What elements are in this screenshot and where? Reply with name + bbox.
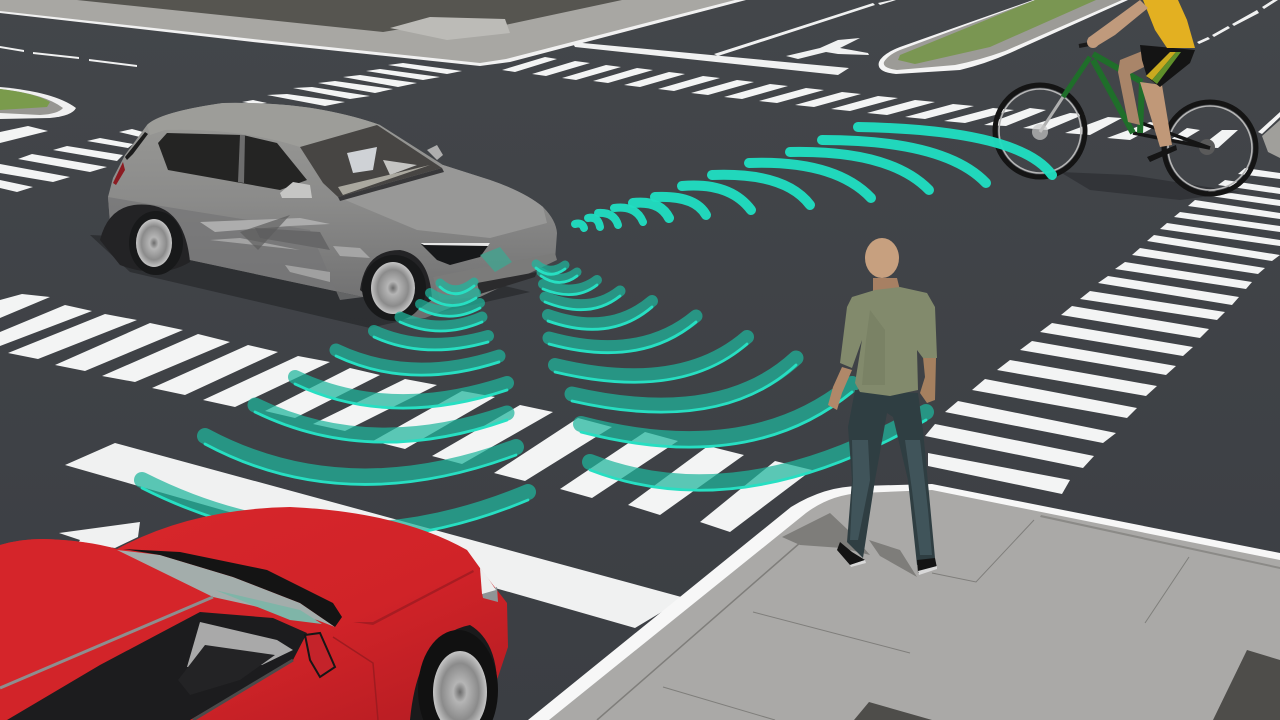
crosswalk: top left	[0, 63, 462, 192]
sensor waves: front beam toward cyclist	[575, 127, 1052, 228]
sensor waves: right beam from grey car	[536, 264, 926, 490]
cyclist on bicycle	[995, 0, 1256, 200]
crosswalk: right	[925, 168, 1280, 494]
crosswalk: top	[502, 57, 1238, 148]
red car	[0, 507, 508, 720]
grey car	[90, 103, 557, 328]
top right traffic island	[879, 0, 1128, 74]
pedestrian	[828, 238, 937, 575]
corner kerb at right edge	[1258, 112, 1280, 158]
sensor waves: left beam from grey car	[142, 282, 528, 539]
sidewalk: lower right corner	[528, 484, 1280, 720]
left traffic island	[0, 87, 76, 119]
crosswalk: left lower	[0, 294, 812, 532]
top left sidewalk	[0, 0, 746, 66]
